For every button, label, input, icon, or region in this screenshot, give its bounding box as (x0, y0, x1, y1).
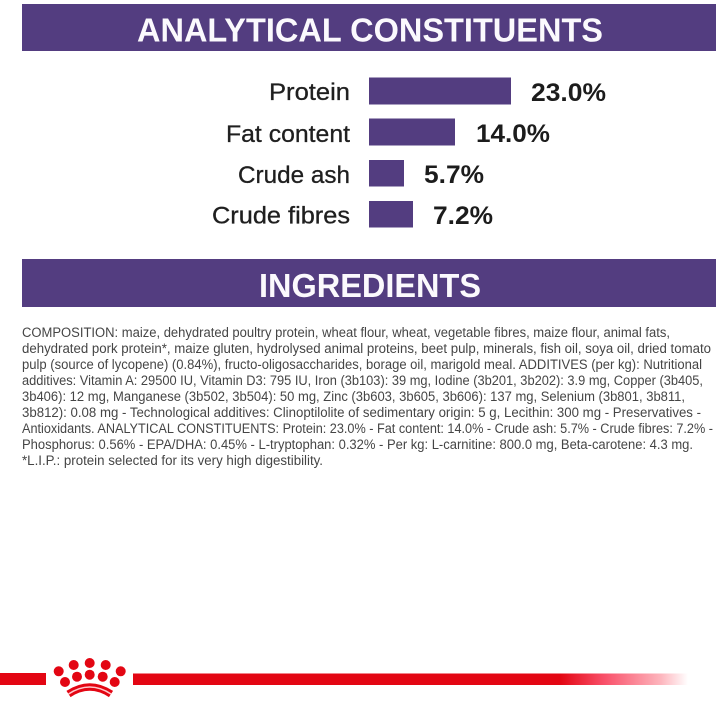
text block: composition: 3b406): 12 mg, Manganese (3b502, 3b504): 50 mg, Zinc (3b603, 3b605, 3b606): 137 mg, Selenium (3b801, 3b811, (22, 389, 685, 404)
text block: composition: COMPOSITION: maize, dehydrated poultry protein, wheat flour, wheat, vegetable fibres, maize flour, animal fats, (22, 325, 670, 340)
bar row: protein: 23.0% (531, 79, 606, 107)
text block: composition (22, 325, 713, 468)
heading: ingredients: INGREDIENTS (259, 267, 481, 304)
bar row: fat content: Fat content (226, 121, 350, 148)
text block: composition: Phosphorus: 0.56% - EPA/DHA: 0.45% - L-tryptophan: 0.32% - Per kg: L-carnitine: 800.0 mg, Beta-carotene: 4.3 mg. (22, 437, 693, 452)
footer line: left red segment (0, 673, 46, 685)
heading: analytical constituents: ANALYTICAL CONSTITUENTS (137, 12, 603, 48)
heading: analytical constituents (22, 4, 716, 51)
bar chart: analytical constituents (212, 78, 606, 230)
text block: composition: dehydrated pork protein*, maize gluten, hydrolysed animal proteins, beet pulp, minerals, fish oil, soya oil, dried tomato (22, 341, 711, 356)
icon: royal canin crown logo (54, 658, 126, 694)
text block: composition: additives: Vitamin A: 29500 IU, Vitamin D3: 795 IU, Iron (3b103): 39 mg, Iodine (3b201, 3b202): 3.9 mg, Copper (3b405, (22, 373, 703, 388)
bar row: crude ash: Crude ash (238, 162, 350, 189)
heading: ingredients (22, 259, 716, 307)
bar row: crude ash: 5.7% (424, 161, 484, 189)
text block: composition: 3b812): 0.08 mg - Technological additives: Clinoptilolite of sedimentary origin: 5 g, Lecithin: 300 mg - Preservatives - (22, 405, 701, 420)
bar row: crude ash (238, 160, 484, 189)
bar row: fat content (226, 118, 550, 148)
bar row: protein: Protein (269, 79, 350, 106)
footer line: right red segment fading out (133, 674, 688, 685)
bar row: crude fibres (212, 201, 493, 230)
bar row: protein (269, 78, 606, 107)
text block: composition: *L.I.P.: protein selected for its very high digestibility. (22, 453, 323, 468)
bar row: crude fibres: 7.2% (433, 202, 493, 230)
bar row: crude fibres: Crude fibres (212, 202, 350, 230)
text block: composition: pulp (source of lycopene) (0.84%), fructo-oligosaccharides, borage oil, marigold meal. ADDITIVES (per kg): Nutritional (22, 357, 702, 372)
bar row: fat content: 14.0% (476, 120, 550, 148)
